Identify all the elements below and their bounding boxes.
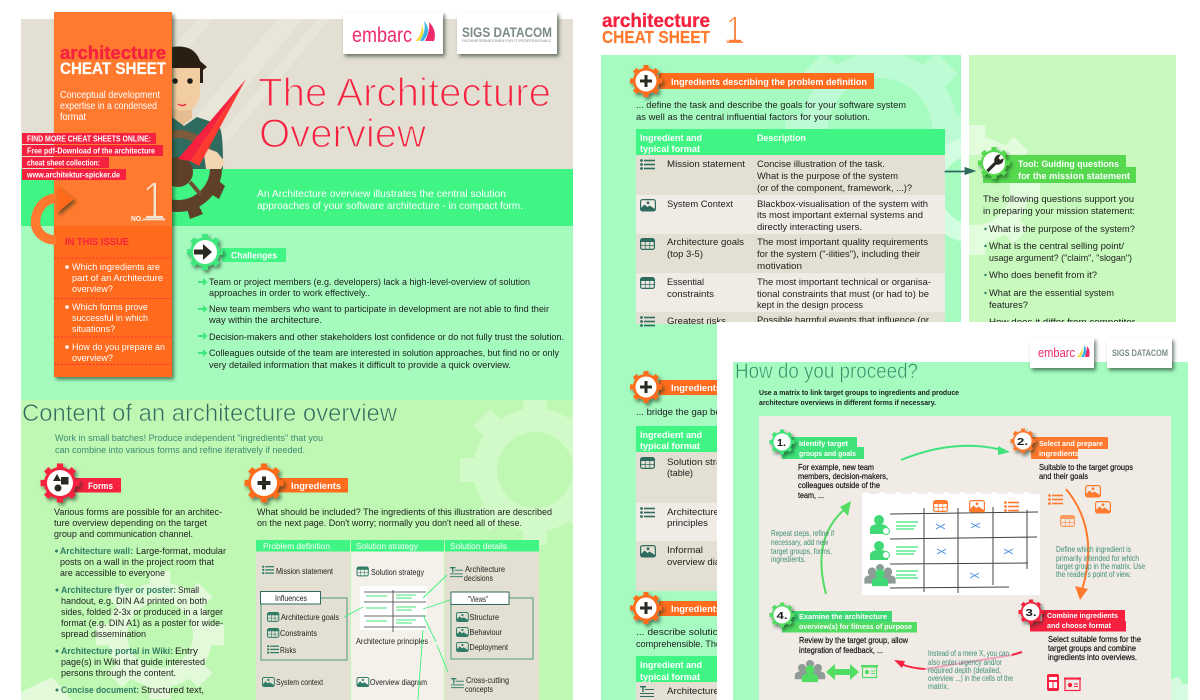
section label <box>659 380 729 395</box>
forms column <box>40 464 227 696</box>
row: architecture goals: Architecture goals <box>667 237 744 248</box>
column: solution details: Deployment <box>470 643 509 652</box>
arrow to tool panel <box>945 168 975 174</box>
ingredients chart: Problem definition <box>263 541 330 551</box>
forms text: Large-format, modular <box>136 546 227 557</box>
step 2 text: Suitable to the target groups <box>1039 462 1133 472</box>
row: system context <box>641 199 928 233</box>
content intro: can combine into various forms and refine iteratively if needed. <box>55 445 305 456</box>
step 3 label <box>1030 610 1126 632</box>
row: essential constraints: constraints <box>667 289 714 300</box>
step 3 text: Select suitable forms for the <box>1048 634 1141 644</box>
ingredients text: What should be included? The ingredients of this illustration are described <box>257 507 552 518</box>
sidebar tagline: format <box>60 112 86 123</box>
step 4 <box>770 602 917 682</box>
section label: Ingredients <box>671 604 721 615</box>
row: system context: its most important external systems and <box>757 210 923 221</box>
arrow: red annotation <box>894 652 1022 669</box>
forms text: ture overview depending on the target <box>54 518 207 529</box>
sheet logo: NO. <box>726 39 733 43</box>
row: mission statement: Concise illustration of the task. <box>757 159 885 170</box>
section label <box>659 73 874 89</box>
tool panel <box>978 147 1136 328</box>
sidebar tagline: expertise in a condensed <box>60 101 157 112</box>
row: essential constraints: The most important technical or organisa- <box>757 277 931 288</box>
column: solution details: concepts <box>465 685 493 694</box>
forms text: handout, e.g. DIN A4 printed on both <box>61 596 207 607</box>
note: define ingredient: target group in the matrix. Use <box>1056 562 1145 571</box>
step 3 <box>1018 600 1141 691</box>
logo: embarc <box>343 12 443 54</box>
column: solution details: Cross-cutting <box>466 676 509 685</box>
challenges label <box>222 248 286 262</box>
solution strategy table: typical format <box>640 441 701 452</box>
in this issue: overview? <box>72 284 113 295</box>
icon: plus gear <box>630 592 662 624</box>
solution details table: Ingredient and <box>640 660 702 671</box>
tool text: The following questions support you <box>983 194 1134 205</box>
tool text: What are the essential system <box>989 288 1114 299</box>
sheet logo <box>602 9 743 50</box>
title: The Architecture <box>258 71 551 115</box>
step 1 label: Identify target <box>799 439 848 448</box>
format icons <box>1047 674 1081 691</box>
challenges bullets: Colleagues outside of the team are interested in solution approaches, but find no or only <box>209 348 559 359</box>
intro text: An Architecture overview illustrates the central solution <box>257 189 506 200</box>
tool text: What is the central selling point/ <box>989 241 1124 252</box>
section intro <box>636 627 724 650</box>
curved orange arrow <box>36 186 74 240</box>
step 2 text: and their goals <box>1039 471 1088 481</box>
icon: wrench gear <box>978 147 1010 179</box>
step 4 text <box>799 635 909 655</box>
problem definition section <box>630 65 945 327</box>
sidebar tagline: Conceptual development <box>60 90 160 101</box>
step 1 <box>770 430 888 500</box>
forms text: posts on a wall in the project room that <box>60 557 214 568</box>
section label: Ingredients <box>671 383 721 394</box>
arrow: step 2 to step 3 <box>1066 489 1088 600</box>
logo: embarc small: embarc <box>1038 345 1075 360</box>
row: essential constraints: tional constraints that must (or had to) be <box>757 289 929 300</box>
red online links: FIND MORE CHEAT SHEETS ONLINE: <box>27 134 151 144</box>
solution strategy table: Informal <box>667 545 703 556</box>
column: solution details <box>450 565 533 694</box>
content heading: Content of an architecture overview <box>22 400 398 427</box>
note: instead of X: overview ...) in the cells of the <box>928 674 1013 683</box>
row: architecture goals: (top 3-5) <box>667 249 703 260</box>
challenges bullets: Decision-makers and other stakeholders lost confidence or do not fully trust the solution. <box>209 332 564 343</box>
column: solution details: Architecture <box>465 565 506 574</box>
in this issue: situations? <box>72 324 115 335</box>
sheet logo: CHEAT SHEET <box>602 27 710 47</box>
forms label: Forms <box>88 481 113 492</box>
in this issue: Which ingredients are <box>72 262 160 273</box>
row people icons <box>864 515 896 586</box>
column: solution strategy: Architecture principles <box>356 637 428 646</box>
problem definition table: typical format <box>640 144 701 155</box>
solution strategy table: overview diagram <box>667 557 742 568</box>
red online links: Free pdf-Download of the architecture <box>27 146 155 156</box>
step 1 text: For example, new team <box>798 462 874 472</box>
sheet logo: architecture <box>602 11 710 32</box>
matrix grid lines <box>890 507 1038 593</box>
step 1 text: members, decision-makers, <box>798 471 888 481</box>
solution strategy table: (table) <box>667 468 693 479</box>
lead text: Use a matrix to link target groups to ingredients and produce <box>759 388 959 397</box>
issue number: NO. <box>131 216 143 223</box>
in this issue: successful in which <box>72 313 148 324</box>
step 3 text: target groups and combine <box>1048 643 1136 653</box>
blue crosses <box>936 523 1013 578</box>
row: greatest risks <box>640 315 930 327</box>
note: instead of X <box>928 649 1013 691</box>
intro text: approaches of your software architecture - in compact form. <box>257 201 523 212</box>
step 3 text <box>1048 634 1141 662</box>
column icons <box>934 501 1019 512</box>
ingredients chart: Solution strategy <box>356 541 419 551</box>
note: define ingredient <box>1056 545 1145 579</box>
illustration: gear wheel <box>172 157 225 219</box>
step 4 gear: 4. <box>776 611 788 622</box>
tool label: Tool: Guiding questions <box>1018 159 1119 170</box>
column: solution strategy: Solution strategy <box>371 568 424 577</box>
step 2 label: Select and prepare <box>1039 439 1103 448</box>
row text lines <box>896 522 918 578</box>
connector lines <box>344 575 450 700</box>
column: solution details: "Views" <box>468 595 488 604</box>
forms text: spread dissemination <box>61 629 146 640</box>
page 3: How do you proceed? <box>717 322 1188 700</box>
issue number: 1 <box>142 171 166 231</box>
speedometer needle <box>178 79 246 166</box>
title <box>258 71 551 156</box>
challenges section <box>187 234 564 371</box>
step 3 label: Combine ingredients <box>1047 611 1118 620</box>
sheet logo: 1 <box>726 9 743 50</box>
page 2: right-hand sheet <box>601 9 1176 700</box>
process panel <box>759 416 1171 700</box>
step 2 text <box>1039 462 1133 481</box>
tool text: How does it differ from competitor <box>989 317 1136 328</box>
step 1 text: colleagues outside of the <box>798 480 880 490</box>
ingredients text: on the next page. Don't worry; normally you don't need all of these. <box>257 518 522 529</box>
step 4 gear <box>770 602 794 628</box>
forms text: page(s) in Wiki that guide interested <box>61 657 205 668</box>
column: problem definition: Mission statement <box>276 567 334 576</box>
section intro <box>636 100 906 123</box>
row: greatest risks: Greatest risks <box>667 316 726 327</box>
note: repeat steps <box>771 529 835 564</box>
content background <box>21 395 610 700</box>
row: greatest risks: Possible harmful events that influence (or <box>757 315 930 326</box>
row: mission statement: (or of the component, framework, ...)? <box>757 183 912 194</box>
logo: SIGS DATACOM <box>457 12 557 54</box>
row: essential constraints: Essential <box>667 277 704 288</box>
icon: forms gear <box>40 464 80 502</box>
ingredients label: Ingredients <box>291 481 341 492</box>
section intro: comprehensible. The <box>636 639 721 650</box>
forms text: Architecture portal in Wiki: <box>61 646 173 657</box>
row: mission statement <box>640 159 912 194</box>
forms text: format (e.g. DIN A1) as a poster for wide- <box>61 618 223 629</box>
forms text: Small <box>178 585 199 596</box>
ingredients chart: Solution details <box>450 541 507 551</box>
row: architecture goals: motivation <box>757 261 802 272</box>
note: define ingredient: Define which ingredient is <box>1056 545 1131 554</box>
step 3 text: ingredients into overviews. <box>1048 652 1137 662</box>
tool panel background <box>969 55 1176 322</box>
in this issue: part of an Architecture <box>72 273 163 284</box>
row: mission statement: Mission statement <box>667 159 745 170</box>
arrow: step 1 to step 2 <box>901 446 1010 460</box>
row: system context: System Context <box>667 199 733 210</box>
tool label: for the mission statement <box>1018 171 1131 182</box>
note: repeat steps: ingredients. <box>771 555 806 564</box>
ingredients column <box>244 464 552 700</box>
row: architecture goals <box>641 237 928 272</box>
step 1 text: team, ... <box>798 490 824 500</box>
note: define ingredient: the reader's point of view. <box>1056 570 1131 579</box>
challenges bullets: New team members who want to participate in development are not able to find their <box>209 304 550 315</box>
lead text <box>759 388 959 407</box>
tool text: Who does benefit from it? <box>989 270 1097 281</box>
icon: plus gear <box>630 371 662 403</box>
orange sidebar <box>22 12 172 377</box>
row: system context: directly interacting users. <box>757 222 862 233</box>
row: essential constraints: kept in the design process <box>757 300 863 311</box>
step 1 label <box>782 437 864 459</box>
step 3 label: and choose format <box>1047 621 1111 630</box>
ingredient icons <box>1048 486 1110 526</box>
ingredients chart <box>256 540 539 700</box>
note: instead of X: Instead of a mere X, you can <box>928 649 1009 658</box>
logo: SIGS small <box>1107 338 1172 368</box>
solution details table: typical format <box>640 672 701 683</box>
red online links: www.architektur-spicker.de <box>26 170 120 180</box>
column: solution details: Structure <box>470 613 499 622</box>
row: essential constraints <box>641 277 931 311</box>
matrix sheet <box>862 492 1040 595</box>
forms text <box>54 507 227 696</box>
sheet <box>862 492 1040 595</box>
overlay sheet background <box>717 322 1188 700</box>
step 2 <box>1010 428 1133 526</box>
ingredients text <box>257 507 552 529</box>
row: mission statement: What is the purpose of the system <box>757 171 898 182</box>
tool text: features? <box>989 300 1028 311</box>
forms text: Various forms are possible for an architec- <box>54 507 222 518</box>
solution strategy table: Solution strategy <box>667 457 740 468</box>
step 4 label: Examine the architecture <box>799 612 887 621</box>
icon: ingredients gear <box>244 464 284 502</box>
solution strategy table: Architecture <box>667 507 719 518</box>
section intro: ... describe solution <box>636 627 724 638</box>
column: solution details: Behaviour <box>470 628 502 637</box>
note: repeat steps: target groups, forms, <box>771 547 832 556</box>
step 4 label <box>782 611 917 632</box>
solution strategy section <box>630 371 746 591</box>
solution details table <box>636 656 731 700</box>
row: architecture goals: The most important quality requirements <box>757 237 928 248</box>
note: repeat steps: Repeat steps, refine if <box>771 529 835 538</box>
step 1 label: groups and goals <box>799 449 856 458</box>
sidebar tagline <box>60 90 160 123</box>
step 4 label: overview(s) for fitness of purpose <box>799 622 912 631</box>
content intro: Work in small batches! Produce independent "ingredients" that you <box>55 433 323 444</box>
column: solution details: decisions <box>464 574 493 583</box>
step 3 gear: 3. <box>1026 608 1037 619</box>
logo: embarc: embarc <box>352 24 412 47</box>
content intro <box>55 433 323 456</box>
forms text: Concise document: <box>61 685 139 696</box>
tool label <box>983 155 1136 183</box>
challenges label: Challenges <box>231 250 277 262</box>
icon: plus gear <box>630 65 662 97</box>
problem definition table <box>636 129 945 327</box>
note: repeat steps: necessary, add new <box>771 538 828 547</box>
red online links <box>22 133 163 180</box>
tool text: in preparing your mission statement: <box>983 206 1135 217</box>
column: problem definition: System context <box>276 678 324 687</box>
column: problem definition: Risks <box>280 646 296 655</box>
column: solution strategy: Overview diagram <box>370 678 427 687</box>
sheet background <box>601 55 961 700</box>
solution details table: Architecture <box>667 686 719 697</box>
problem definition table: Ingredient and <box>640 133 702 144</box>
logo: SIGS DATACOM: SIGS DATACOM <box>462 24 552 40</box>
tool text: usage argument? ("claim", "slogan") <box>989 253 1132 264</box>
challenges bullets: very detailed information that makes it difficult to provide a quick overview. <box>209 360 511 371</box>
illustration: man at steering gear <box>172 46 225 169</box>
forms text: Structured text, <box>141 685 204 696</box>
lead text: architecture overviews in different forms if necessary. <box>759 398 936 407</box>
intro text <box>257 189 523 212</box>
in this issue: How do you prepare an <box>72 342 165 353</box>
solution details section <box>630 592 731 700</box>
row: system context: Blackbox-visualisation of the system with <box>757 199 928 210</box>
step 2 label: ingredients <box>1039 449 1079 458</box>
title: Overview <box>259 112 426 156</box>
logo: SIGS small: SIGS DATACOM <box>1112 348 1168 358</box>
challenges bullets <box>198 277 564 371</box>
page 1: The Architecture Overview <box>21 12 610 700</box>
green intro band <box>21 169 573 226</box>
sidebar logo: architecture <box>60 42 166 63</box>
in this issue: overview? <box>72 353 113 364</box>
logo: SIGS DATACOM: FACHINFORMATIONEN FÜR IT-PROFESSIONALS <box>462 39 552 43</box>
section intro: ... bridge the gap between <box>636 407 746 418</box>
section label: Ingredients describing the problem definition <box>671 77 867 88</box>
in this issue: IN THIS ISSUE <box>65 236 129 248</box>
icon: challenges gear arrow <box>187 234 223 270</box>
challenges bullets: approaches in order to work effectively.. <box>209 288 370 299</box>
issue number <box>131 171 166 231</box>
tool text <box>983 194 1136 328</box>
challenges background <box>21 226 573 400</box>
column: problem definition: Architecture goals <box>281 613 339 622</box>
forms text: persons through the content. <box>61 668 176 679</box>
forms text: are accessible to everyone <box>60 568 165 579</box>
tool text: What is the purpose of the system? <box>989 224 1135 235</box>
column: problem definition: Influences <box>275 594 307 603</box>
note: define ingredient: primarily intended for which <box>1056 554 1139 563</box>
step 4 text: integration of feedback, ... <box>799 645 883 655</box>
forms label <box>70 478 121 492</box>
forms text: group and communication channel. <box>54 529 193 540</box>
column: solution strategy <box>356 567 428 687</box>
step 1 gear: 1. <box>777 438 786 449</box>
solution strategy table: principles <box>667 518 708 529</box>
section intro: ... define the task and describe the goals for your software system <box>636 100 906 111</box>
challenges bullets: Team or project members (e.g. developers) lack a high-level-overview of solution <box>209 277 530 288</box>
feedback icons <box>795 660 878 682</box>
step 2 gear: 2. <box>1017 437 1028 448</box>
solution strategy table <box>636 426 742 591</box>
column: problem definition: Constraints <box>280 629 317 638</box>
ingredients label <box>275 478 348 492</box>
sidebar logo <box>60 42 167 78</box>
forms text: Architecture flyer or poster: <box>61 585 176 596</box>
red online links: cheat sheet collection: <box>27 158 100 168</box>
forms text: sides, folded 2-3x or produced in a larger <box>61 607 224 618</box>
in this issue: Which forms prove <box>72 302 148 313</box>
in this issue <box>54 236 172 364</box>
forms text: Entry <box>175 646 198 657</box>
header background <box>21 19 573 169</box>
forms text: Architecture wall: <box>60 546 133 557</box>
section intro: as well as the central influential factors for your solution. <box>636 112 870 123</box>
heading: how do you proceed: How do you proceed? <box>735 360 918 383</box>
step 4 text: Review by the target group, allow <box>799 635 909 645</box>
logo: embarc small <box>1030 338 1094 368</box>
note: instead of X: also enter urgency and/or <box>928 658 1002 667</box>
step 2 label <box>1031 437 1108 459</box>
row: architecture goals: for the system ("-ilities"), including their <box>757 249 921 260</box>
column: problem definition <box>260 566 347 687</box>
problem definition table: Description <box>757 133 806 144</box>
step 1 text <box>798 462 888 500</box>
note: instead of X: required depth (detailed, <box>928 666 1001 675</box>
sidebar logo: CHEAT SHEET <box>60 59 167 78</box>
solution strategy table: Ingredient and <box>640 430 702 441</box>
arrow: repeat loop <box>821 501 851 594</box>
note: instead of X: matrix. <box>928 682 949 691</box>
challenges bullets: way within the architecture. <box>208 315 322 326</box>
